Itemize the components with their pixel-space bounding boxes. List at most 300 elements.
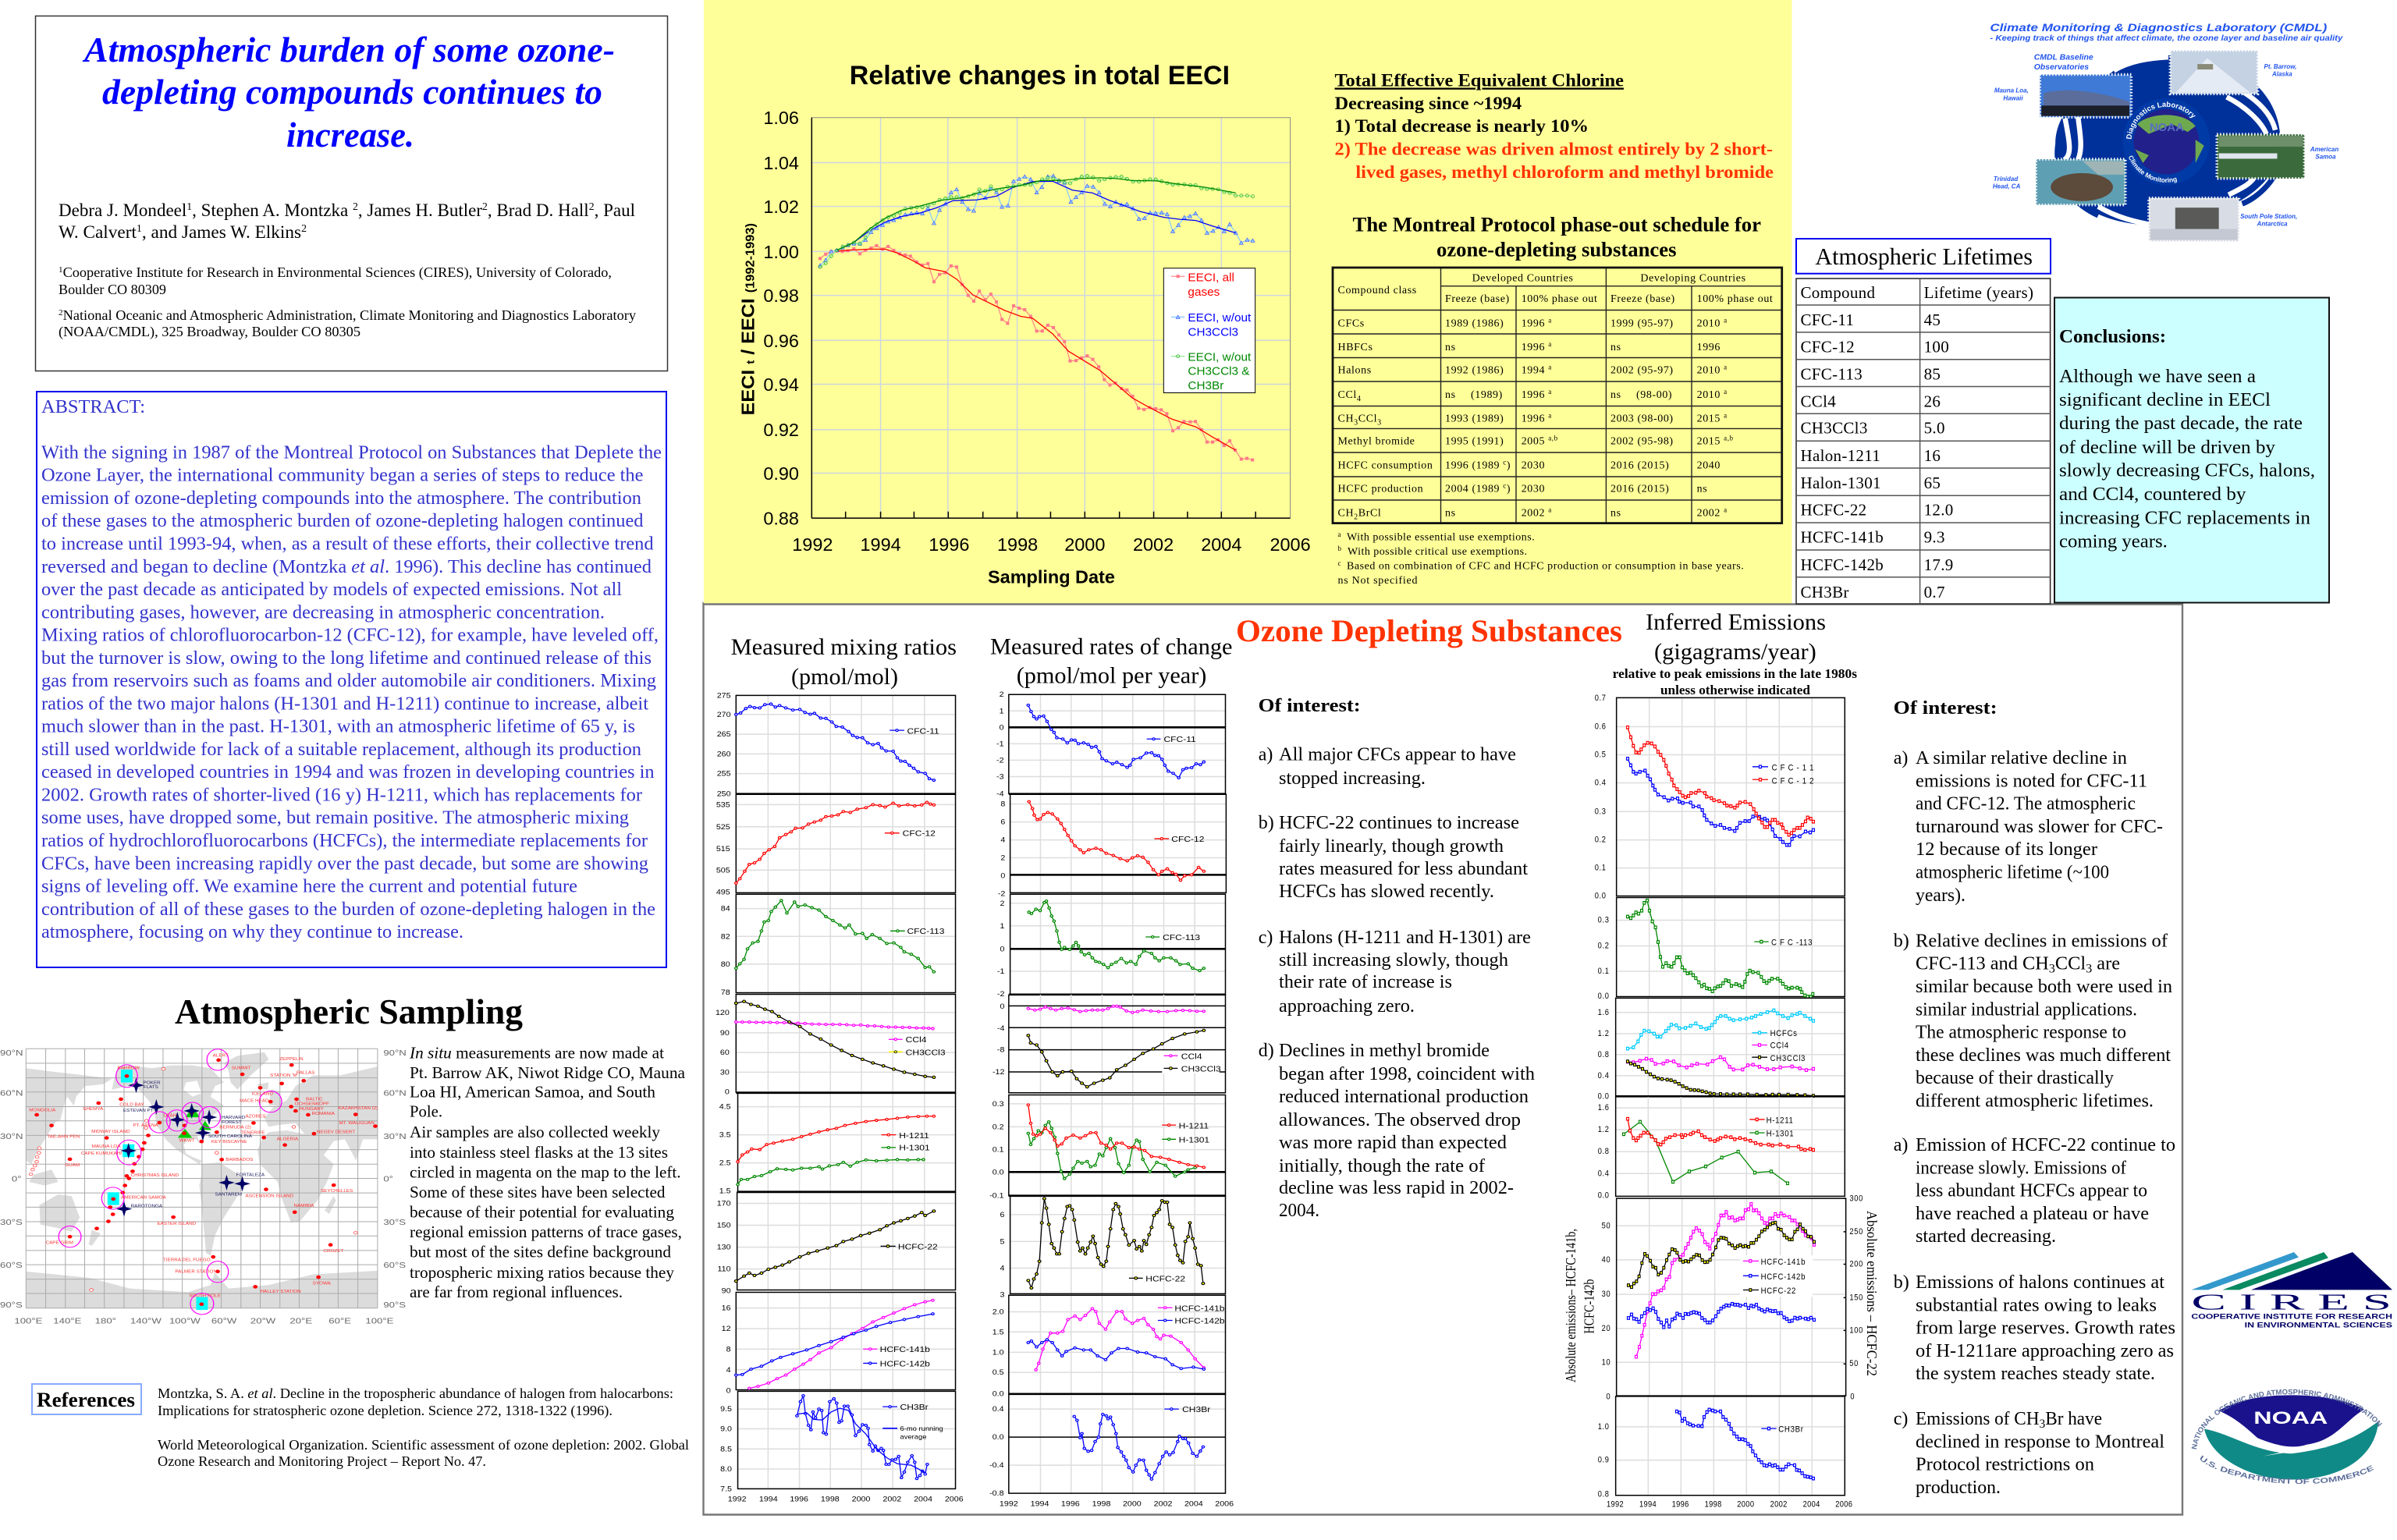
table: montreal protocol schedule: HCFC production [1337,484,1423,495]
observatory labels: Alaska [2271,71,2292,78]
green triangles [178,1106,211,1138]
table: montreal protocol schedule: 2005 [1522,436,1545,448]
chart: CH3Br rate of change: 0.0 [993,1434,1004,1442]
chart: relative changes in total EECI: 1998 [997,534,1038,555]
chart: CH3Br mixing ratio: 1998 [821,1496,840,1503]
table: atmospheric lifetimes: 9.3 [1924,527,1945,546]
text: of interest, left column: All major CFCs appear to have [1279,745,1516,765]
table: atmospheric lifetimes: HCFC-142b [1801,555,1884,574]
panel: conclusions: slowly decreasing CFCs, halons, [2059,460,2315,481]
chart: relative changes in total EECI: EECI t / EECI (1992-1993) [737,223,758,415]
chart: CFC-11 mixing ratio [717,692,956,798]
site labels: CHRISTMAS ISLAND [131,1174,179,1178]
text: of interest, left column: a) [1259,745,1273,765]
site labels: NAMIBIA [294,1204,314,1208]
site labels: KAZAKHSTAN (2) [338,1107,378,1111]
chart: HCFC absolute emissions: 0 [1850,1393,1855,1401]
authors: Debra J. Mondeel [59,200,190,221]
panel: abstract: Ozone Layer, the international community began a series of steps to reduce the [41,466,644,486]
chart: CH3Br mixing ratio: 6-mo running [900,1425,943,1432]
observatory labels: Trinidad [1994,176,2018,183]
chart: CFC-11 and CFC-12 emissions: 0.2 [1595,836,1607,845]
logo: NOAA: U.S. DEPARTMENT OF COMMERCE [2200,1456,2374,1484]
site labels: BARROW [117,1066,140,1070]
chart: relative changes in total EECI: 1992 [792,534,833,555]
chart: CFC-11 mixing ratio: 260 [717,750,731,758]
table: atmospheric lifetimes: 5.0 [1924,419,1945,438]
table: montreal protocol schedule: 100% phase out [1522,293,1598,305]
site labels: AMERICAN SAMOA [121,1196,166,1200]
chart: CH3Br mixing ratio: average [900,1433,927,1440]
chart: halon emissions: 0.8 [1598,1148,1610,1156]
chart: HCFC absolute emissions: 20 [1602,1324,1610,1333]
table: atmospheric lifetimes: Lifetime (years) [1924,283,2033,302]
table: atmospheric lifetimes: 45 [1924,310,1941,329]
charts: inferred emissions, upper rows [1595,694,1845,1102]
chart: CFC-11 mixing ratio: 265 [717,731,731,739]
chart: HCFC absolute emissions: HCFC-22 [1761,1287,1796,1296]
site labels: HALLEY STATION [260,1290,301,1294]
table: montreal protocol schedule: 1992 (1986) [1445,365,1504,377]
table: montreal protocol schedule: CFCs [1337,318,1365,330]
chart: CFC-12 rate of change: 6 [1000,818,1006,826]
site labels: AZORES [246,1115,266,1119]
table: montreal protocol schedule: a [1548,364,1552,371]
site labels: BARBADOS [225,1159,254,1162]
chart: CFC-12 mixing ratio: 495 [716,889,730,896]
table: atmospheric lifetimes: CFC-12 [1801,338,1855,357]
center globe [2122,98,2210,185]
chart: CH3Br emissions: 1992 [1607,1500,1624,1510]
legend: EECI series: CH3CCl3 [1188,326,1238,339]
chart: CFC-113 emissions: C F C -113 [1771,939,1813,948]
chart: CCl4 and CH3CCl3 mixing ratio [716,994,956,1096]
map axis labels: 90°S [383,1300,406,1310]
authors: , Stephen A. Montzka [192,200,353,221]
observatory labels: Hawaii [2003,94,2023,101]
table: montreal protocol schedule: 1994 [1522,365,1545,377]
site labels: COLD BAY [119,1103,144,1107]
panel: abstract: With the signing in 1987 of the Montreal Protocol on Substances that Deplete the [41,442,662,463]
table: montreal protocol schedule: 2004 (1989 [1445,484,1500,495]
site labels: MT. WALIGUAN [339,1122,375,1126]
chart: HCFC absolute emissions: 0 [1606,1393,1610,1401]
table: montreal protocol schedule: CH [1337,413,1354,425]
panel: conclusions: of decline will be driven by [2059,438,2275,458]
chart: CH3Br rate of change: -0.8 [989,1490,1004,1498]
affiliations: 1 [59,265,63,275]
site labels: STATION 'M' [270,1073,298,1078]
chart: HCFC-141b and 142b mixing ratio: 12 [722,1325,731,1333]
text: in situ description: Air samples are also collected weekly [410,1123,660,1141]
chart: HCFC-22 mixing ratio: 170 [717,1200,731,1208]
chart: CH3Br emissions: 2000 [1737,1500,1754,1510]
chart: HCFC-22 rate of change: HCFC-22 [1145,1275,1185,1283]
chart: halons mixing ratio: H-1211 [899,1132,929,1141]
map axis labels: 60°S [0,1261,23,1270]
table: atmospheric lifetimes: CCl4 [1801,392,1836,410]
affiliations: Cooperative Institute for Research in Environmental Sciences (CIRES), University of Colorado, [63,264,612,281]
chart: relative changes in total EECI: 1996 [929,534,969,555]
blue swirl [2054,55,2281,225]
chart: CH3Br mixing ratio: 2006 [945,1496,964,1503]
panel: abstract: much slower than in the past. H-1301, with an atmospheric lifetime of 65 y, is [41,717,635,737]
table: montreal protocol schedule: 3 [1377,419,1382,428]
chart: HCFCs CCl4 CH3CCl3 emissions: 0.8 [1598,1050,1610,1059]
site labels: ICELAND [252,1092,273,1096]
chart: relative changes in total EECI [737,61,1311,587]
table: montreal protocol schedule: a,b [1724,435,1734,442]
chart: CFC-113 rate of change: 2 [1000,900,1005,908]
chart: halons rate of change: -0.1 [989,1192,1004,1200]
site labels: RAROTONGA [131,1205,162,1208]
chart: CH3Br rate of change: 1994 [1031,1500,1049,1508]
table: montreal protocol schedule: c [1503,482,1507,490]
observatory labels: Mauna Loa, [1994,87,2029,94]
text: of interest, right column: CFC-113 and CH [1916,954,2047,974]
text: of interest, right column: emissions is noted for CFC-11 [1916,771,2147,791]
chart: halons mixing ratio: 1.5 [719,1187,731,1195]
table footnotes: With possible critical use exemptions. [1348,546,1527,558]
chart: CFC-113 mixing ratio: CFC-113 [907,928,944,936]
chart: CH3Br mixing ratio: 8.0 [720,1466,732,1474]
center globe: NOAA [2150,121,2184,134]
text: of interest, right column: the system reaches steady state. [1916,1364,2155,1384]
table: montreal protocol schedule: CCl [1358,413,1377,425]
chart: HCFCs CCl4 CH3CCl3 emissions: 0.0 [1598,1092,1610,1102]
text: of interest, right column: atmospheric lifetime (~100 [1916,863,2109,883]
table: montreal protocol schedule: 2002 (95-97) [1610,365,1674,377]
chart: CH3Br emissions: 2002 [1770,1500,1788,1510]
chart: HCFC-141b and 142b rate of change: 0.0 [993,1390,1004,1398]
authors: 1 [186,201,192,213]
table: montreal protocol schedule: 1996 [1522,413,1545,425]
map axis labels: 60°N [383,1088,407,1098]
text: in situ description: In situ measurements are now made at [409,1044,664,1063]
observatory labels: American [2310,146,2338,153]
table: atmospheric lifetimes: CH3CCl3 [1801,419,1868,438]
table: montreal protocol schedule: 1995 (1991) [1445,436,1504,448]
table: atmospheric lifetimes: 26 [1924,392,1941,410]
chart: CCl4 and CH3CCl3 rate of change: -4 [997,1024,1005,1033]
chart: CH3Br rate of change: -0.4 [989,1462,1004,1470]
text: references [158,1386,689,1469]
site labels: MAUNA LOA [92,1144,121,1149]
chart: CFC-113 rate of change: 1 [1000,923,1005,931]
chart: HCFC absolute emissions: 10 [1602,1358,1610,1368]
site labels: MIDWAY ISLAND [91,1130,130,1134]
panel: conclusions: during the past decade, the rate [2059,413,2303,434]
table: montreal protocol schedule: 1999 (95-97) [1610,318,1674,330]
chart: HCFC-22 rate of change: 5 [1000,1238,1005,1246]
table: montreal protocol schedule: ns [1445,342,1456,353]
text: of interest, right column: and CFC-12. The atmospheric [1916,794,2136,814]
text: of interest, left column: c) [1259,928,1273,948]
chart: CH3Br mixing ratio: 2002 [882,1496,902,1503]
chart: CCl4 and CH3CCl3 rate of change: 0 [1000,1002,1005,1011]
chart: halon emissions: 0.4 [1598,1169,1610,1178]
text: of interest, right column: production. [1916,1478,2001,1498]
panel: conclusions: significant decline in EECl [2059,390,2271,410]
site labels: KEY BISCAYNE [211,1140,247,1144]
chart: CFC-113 emissions: 0.2 [1598,942,1610,951]
chart: HCFC absolute emissions [1602,1194,1863,1401]
table footnotes: a [1337,530,1341,538]
heading: measured mixing ratios [731,634,957,690]
text: of interest, right column: Emissions of halons continues at [1916,1272,2164,1293]
table: montreal protocol schedule: ) [1507,460,1511,471]
chart: CFC-11 rate of change: 0 [1000,724,1004,732]
chart: CH3Br rate of change: 1996 [1061,1500,1080,1508]
table: montreal protocol schedule: 100% phase out [1697,293,1773,305]
observatory labels [1993,54,2338,228]
site labels: FOREST [222,1120,242,1125]
site labels: WKWT [179,1139,195,1143]
panel: abstract: but the turnover is slow, owing to the long lifetime and continued release of this [41,648,652,669]
panel: abstract: emission of ozone-depleting compounds into the atmosphere. The contribution [41,488,641,509]
chart: CFC-113 mixing ratio: 78 [721,988,730,997]
chart: CCl4 and CH3CCl3 mixing ratio: CCl4 [906,1036,926,1045]
chart: CH3Br rate of change: 0.4 [993,1406,1004,1414]
chart: HCFC-22 mixing ratio: HCFC-22 [898,1243,938,1251]
panel: abstract: contributing gases, however, are decreasing in atmospheric concentration. [41,602,605,623]
table: montreal protocol schedule: HCFC consumption [1337,460,1433,471]
chart: CH3Br emissions: 1998 [1705,1500,1722,1510]
map axis labels: 140°E [53,1316,81,1325]
table: atmospheric lifetimes: 16 [1924,446,1941,465]
site labels: PT. ARENA [133,1123,158,1128]
chart: HCFC-141b and 142b rate of change [993,1295,1225,1398]
chart: CFC-11 and CFC-12 emissions: C F C - 1 1 [1772,764,1814,773]
affiliations: 2 [59,308,63,318]
logo: CIRES: C I R E S [2191,1291,2392,1315]
map axis labels: 20°E [289,1316,312,1325]
chart: CFC-11 and CFC-12 emissions [1595,694,1845,901]
text: references: Implications for stratospheric ozone depletion. Science 272, 1318-1322 (1996). [158,1403,613,1419]
site labels: SHEMYA [83,1108,104,1112]
text: of interest, right column: Protocol restrictions on [1916,1455,2094,1475]
text: of interest, right column: Of interest: [1894,698,1998,719]
chart: HCFC absolute emissions: 50 [1602,1222,1610,1231]
panel: abstract: Mixing ratios of chlorofluorocarbon-12 (CFC-12), for example, have leveled off, [41,626,659,646]
site labels: SUMMIT [232,1066,251,1070]
chart: HCFC absolute emissions: 300 [1849,1194,1863,1204]
text: of interest, right column: less abundant HCFCs appear to [1916,1181,2147,1201]
table: montreal protocol schedule: 2016 (2015) [1610,484,1669,495]
chart: HCFC-22 mixing ratio: 130 [717,1244,731,1251]
observatory labels: Pt. Barrow, [2264,63,2296,70]
text: of interest, left column: reduced international production [1279,1087,1529,1107]
panel: conclusions: Conclusions: [2059,327,2166,347]
table: montreal protocol schedule: (1989) [1471,389,1503,401]
chart: CCl4 and CH3CCl3 mixing ratio: 120 [716,1009,730,1017]
panel: abstract: ABSTRACT: [41,397,145,417]
axis title: left absolute emissions [1563,1229,1597,1382]
chart: HCFC-22 mixing ratio: 90 [722,1287,731,1295]
site labels: ESTEVAN PT [123,1109,154,1113]
site labels: TENERIFE [240,1131,265,1135]
table: montreal protocol schedule: ns [1610,507,1621,520]
table: montreal protocol schedule: Compound class [1337,285,1417,296]
authors: 2 [301,223,307,235]
chart: halon emissions [1598,1096,1845,1201]
heading: inferred emissions: Inferred Emissions [1646,609,1826,635]
text: of interest, right column: Br have [2045,1409,2102,1429]
site labels: MACE HEAD [240,1099,269,1103]
map axis labels: 90°S [0,1300,23,1310]
chart: halon emissions: 0.0 [1598,1191,1610,1201]
text: of interest, right column: similar because both were used in [1916,977,2172,997]
chart: CH3Br mixing ratio: 1994 [759,1496,778,1503]
table: montreal protocol schedule: 2016 (2015) [1610,460,1669,471]
charts: mixing ratios and rates, lower four rows [717,1093,1234,1508]
panel: abstract: over the past decade as anticipated by models of expected emissions. Not all [41,580,622,600]
logo: CIRES [2191,1252,2392,1329]
table: montreal protocol schedule: 2003 (98-00) [1610,413,1674,425]
center globe: Climate Monitoring [2129,156,2177,183]
poster title: increase. [286,115,414,154]
heading: atmospheric lifetimes [1796,239,2051,274]
table: atmospheric lifetimes: Halon-1211 [1801,446,1880,465]
text: of interest, right column: are [2092,954,2120,974]
text: of interest, left column: HCFCs has slowed recently. [1279,882,1494,902]
chart: CFC-113 emissions: 0.3 [1598,916,1610,925]
affiliations: Boulder CO 80309 [59,282,166,297]
chart: CFC-12 rate of change: 0 [1000,872,1006,880]
panel: abstract: reversed and began to decline (Montzka et al. 1996). This decline has continued [41,557,652,577]
chart: HCFC absolute emissions: HCFC-141b [1761,1258,1806,1267]
chart: halons rate of change: 0.0 [993,1169,1004,1176]
chart: HCFC-22 mixing ratio: 150 [717,1222,731,1230]
observatory labels: Antarctica [2257,221,2288,228]
chart: halons rate of change: 0.1 [993,1146,1004,1154]
text: of interest, right column: A similar relative decline in [1916,748,2127,768]
chart: relative changes in total EECI: 0.96 [763,331,799,351]
heading: ozone depleting substances: Ozone Depleting Substances [1236,613,1622,648]
panel: abstract: some uses, have dropped some, but remain positive. The atmospheric mixing [41,808,629,829]
site labels: POKER [144,1081,161,1085]
logo: NOAA [2191,1389,2382,1484]
text: of interest, right column: turnaround was slower for CFC- [1916,817,2163,837]
legend: EECI series: CH3CCl3 & [1188,365,1250,378]
table: montreal protocol schedule: 2010 [1697,365,1721,377]
chart: CCl4 and CH3CCl3 rate of change: CH3CCl3 [1181,1065,1221,1073]
text: of interest, right column: b) [1894,931,1909,951]
chart: CFC-11 mixing ratio: 255 [717,770,731,778]
chart: CCl4 and CH3CCl3 mixing ratio: 90 [720,1030,730,1038]
site labels: PALMER STATION [175,1270,217,1274]
table: montreal protocol schedule: 2015 [1697,413,1721,425]
chart: CFC-12 rate of change: 4 [1000,836,1006,844]
references heading box: References [37,1389,135,1411]
table: montreal protocol schedule: ns [1445,507,1456,520]
text: of interest, left column: their rate of increase is [1279,972,1452,992]
text: of interest, right column: b) [1894,1272,1909,1293]
table: montreal protocol schedule: 1996 [1522,342,1545,353]
table footnotes: Based on combination of CFC and HCFC production or consumption in base years. [1347,560,1744,572]
table: montreal protocol schedule: 2030 [1522,484,1545,495]
chart: HCFC-141b and 142b mixing ratio: HCFC-142b [880,1360,930,1368]
open red sites [29,1067,357,1291]
map axis labels: 100°E [14,1316,43,1325]
map axis labels [0,1048,407,1325]
text: of interest, left column: fairly linearly, though growth [1279,836,1504,857]
chart: CCl4 and CH3CCl3 mixing ratio: 0 [725,1088,730,1096]
chart: CFC-11 and CFC-12 emissions: 0.3 [1595,807,1607,816]
chart: HCFC-22 rate of change: 6 [1000,1212,1005,1219]
site labels: TAE-AHN PEN. [47,1135,81,1139]
graphic: CMDL baseline observatories: - Keeping track of things that affect climate, the ozone layer and baseline air quality [1990,34,2343,43]
text: total effective equivalent chlorine: lived gases, methyl chloroform and methyl bromide [1355,162,1774,182]
chart: CFC-11 and CFC-12 emissions: 0.6 [1595,722,1607,732]
chart: CFC-12 mixing ratio: 535 [716,801,730,809]
heading: atmospheric lifetimes: Atmospheric Lifetimes [1815,243,2033,270]
map axis labels: 90°N [0,1048,23,1058]
chart: CFC-11 rate of change: -2 [996,757,1004,765]
chart: HCFC-141b and 142b mixing ratio: 16 [722,1304,731,1312]
chart: halon emissions: H-1211 [1767,1116,1794,1126]
table: montreal protocol schedule: 4 [1357,395,1361,403]
chart: CH3Br emissions: 0.8 [1598,1490,1610,1499]
table: montreal protocol schedule: Halons [1337,365,1372,377]
table: montreal protocol schedule: 2030 [1522,460,1545,471]
map axis labels: 90°N [383,1048,407,1058]
chart: CFC-113 emissions: 0.0 [1598,992,1610,1001]
table footnotes: b [1337,545,1342,552]
chart: HCFC absolute emissions: 250 [1849,1227,1863,1237]
site labels [29,1054,378,1298]
text: of interest, right column: different atmospheric lifetimes. [1916,1091,2154,1111]
text: total effective equivalent chlorine: 1) Total decrease is nearly 10% [1334,116,1589,136]
chart: CFC-113 emissions: 0.1 [1598,967,1610,976]
map axis labels: 30°S [0,1217,23,1227]
observatory labels: Head, CA [1993,183,2021,190]
chart: CH3Br mixing ratio: 9.5 [720,1406,732,1414]
table: montreal protocol schedule: a [1724,364,1728,371]
chart: CH3Br emissions: 0.9 [1598,1456,1610,1465]
table: montreal protocol schedule: 1989 (1986) [1445,318,1504,330]
chart: CH3Br emissions: 2004 [1803,1500,1820,1510]
chart: halons mixing ratio: H-1301 [899,1144,930,1152]
text: of interest, left column: initially, though the rate of [1279,1156,1485,1176]
chart: HCFC-141b and 142b rate of change: HCFC-141b [1174,1304,1225,1313]
chart: HCFCs CCl4 CH3CCl3 emissions: 1.2 [1598,1029,1610,1038]
text: of interest, right column: Emission of HCFC-22 continue to [1916,1135,2175,1155]
heading: measured rates of change: (pmol/mol per year) [1017,663,1206,689]
chart: relative changes in total EECI: 2002 [1133,534,1174,555]
chart: HCFCs CCl4 CH3CCl3 emissions: HCFCs [1770,1029,1798,1038]
table footnotes: With possible essential use exemptions. [1347,532,1535,544]
chart: CFC-113 rate of change [997,894,1225,999]
table footnotes: c [1337,559,1341,567]
site labels: ROMANIA [312,1112,335,1116]
chart: CH3Br mixing ratio: 1996 [790,1496,809,1503]
chart: CFC-11 and CFC-12 emissions: C F C - 1 2 [1772,777,1814,786]
legend: EECI series: gases [1188,286,1220,299]
panel: conclusions: increasing CFC replacements in [2059,509,2310,529]
magenta flask-site circles [59,1049,282,1315]
site labels: FLATS [144,1085,158,1090]
site labels: SOUTH CAROLINA [208,1135,252,1139]
affiliations [59,264,636,340]
map axis labels: 60°S [383,1261,406,1270]
panel: abstract: CFCs, have been increasing rapidly over the past decade, but some are showing [41,853,648,874]
text: of interest, left column: allowances. The observed drop [1279,1110,1521,1130]
chart: CH3Br rate of change: 2000 [1123,1500,1142,1508]
chart: CH3Br rate of change: CH3Br [1182,1406,1211,1414]
chart: relative changes in total EECI: 2000 [1064,534,1105,555]
observatory photos [2036,51,2304,241]
